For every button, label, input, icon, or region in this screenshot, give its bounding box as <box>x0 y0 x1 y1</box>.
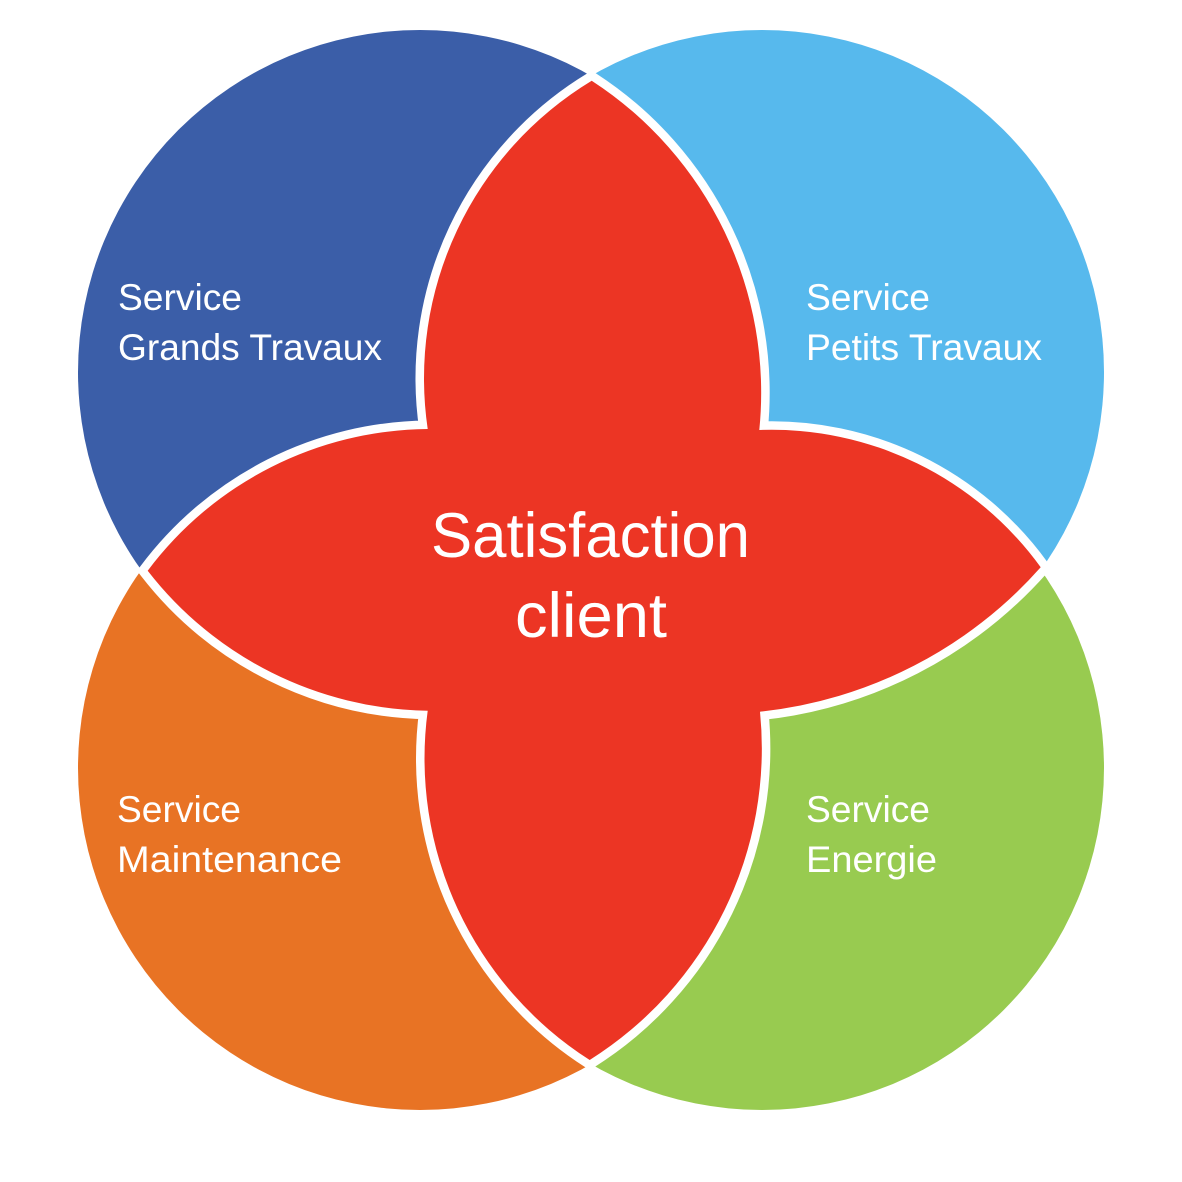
label: Service Grands Travaux: Service <box>118 277 242 318</box>
label: Service Maintenance: Maintenance <box>117 839 342 880</box>
label: Service Maintenance: Service <box>117 789 241 830</box>
label: Service Grands Travaux: Grands Travaux <box>118 327 382 368</box>
center title: Satisfaction client: client <box>515 581 668 651</box>
label: Service Energie <box>806 789 937 880</box>
central red four-petal shape <box>148 81 1041 1060</box>
label: Service Energie: Energie <box>806 839 937 880</box>
label: Service Grands Travaux <box>118 277 382 368</box>
circle: Service Energie <box>420 426 1104 1110</box>
label: Service Petits Travaux: Petits Travaux <box>806 327 1042 368</box>
label: Service Energie: Service <box>806 789 930 830</box>
circle: Service Petits Travaux <box>420 30 1104 714</box>
circle: Service Maintenance <box>78 426 762 1110</box>
label: Service Petits Travaux: Service <box>806 277 930 318</box>
label: Service Maintenance <box>117 789 342 880</box>
center title: Satisfaction client <box>431 501 750 651</box>
circle: Service Grands Travaux <box>78 30 762 714</box>
label: Service Petits Travaux <box>806 277 1042 368</box>
center title: Satisfaction client: Satisfaction <box>431 501 750 571</box>
